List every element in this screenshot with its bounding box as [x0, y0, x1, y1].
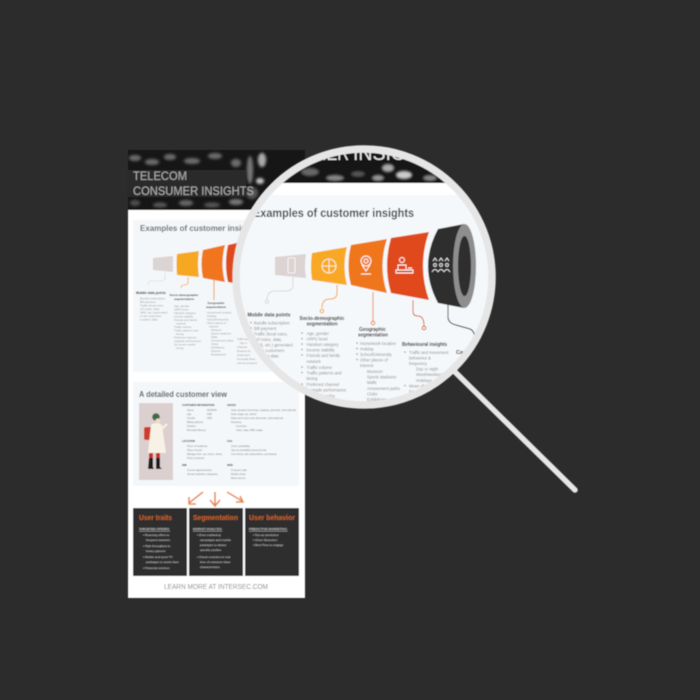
text: geographic segmentation: Geographic — [359, 327, 386, 333]
panel: segmentation — [189, 508, 243, 576]
panel: user traits: frequent travelers — [146, 538, 171, 542]
small text: mobile data points: to the customers — [140, 314, 162, 318]
small text: insights fragment: Social users — [237, 354, 251, 357]
text: socio-demographic segmentation: Income stability — [306, 348, 336, 352]
panel: segmentation: • Drive marketing — [197, 533, 221, 537]
customer attributes: Billing address — [187, 421, 204, 424]
panel: user traits: • Mobile and sport TV — [143, 555, 174, 559]
heading: A detailed customer view — [139, 389, 227, 399]
panel: user traits: User traits — [139, 515, 172, 522]
small text: geographic: Restaurants — [211, 352, 227, 356]
customer attributes: IMSI — [207, 417, 212, 420]
panel: segmentation: • Check evolution in real — [197, 555, 231, 559]
text: behavioural insights — [402, 342, 449, 394]
text: socio-demographic segmentation — [300, 316, 347, 398]
magnified header title left: MER — [313, 143, 349, 165]
small text: geographic: Geographic — [207, 301, 225, 305]
text: geographic segmentation: Exhibitions — [367, 397, 387, 402]
funnel — [275, 224, 476, 308]
small text: socio-demographic: Traffic volume — [174, 325, 192, 329]
text: socio-demographic segmentation: Handset category — [306, 342, 340, 347]
icon: demographics — [322, 259, 336, 273]
customer attributes: Current apps/sessions — [187, 469, 213, 472]
text: geographic segmentation: segmentation — [358, 332, 388, 338]
customer attributes: CHA — [227, 440, 233, 443]
small text: geographic: Malls — [211, 335, 218, 339]
panel: user behavior — [245, 508, 299, 576]
panel: segmentation: campaigns and mobile — [200, 538, 231, 542]
text: mobile data points: to the customers — [254, 348, 284, 353]
customer attributes: USAGE — [227, 404, 236, 407]
customer attributes: Voice, data, SMS usage — [236, 429, 263, 432]
icon: person at desk — [396, 258, 413, 273]
customer attributes: Roaming — [231, 421, 242, 424]
small text: socio-demographic: On-screen and/or — [174, 342, 196, 346]
text: socio-demographic segmentation: Friends and family — [306, 353, 341, 358]
customer attributes: IMEI — [207, 413, 212, 416]
small text: mobile data points: Bill payment — [140, 300, 156, 304]
panel: segmentation: time of customer base — [200, 560, 231, 564]
small text: geographic: Sports stadiums — [211, 332, 232, 336]
panel: user traits: packages to sports fans — [146, 560, 179, 564]
customer attributes: Data and voice and domestic, international — [231, 417, 283, 420]
small text: mobile data points: Traffic (local voice, — [140, 304, 164, 308]
text: socio-demographic segmentation: network — [306, 359, 322, 364]
segment: socio-demographic — [311, 247, 347, 285]
icon: phone — [288, 258, 295, 273]
panel: segmentation: MARKET ANALYSIS: — [193, 527, 222, 531]
small text: insights fragment: Day or — [240, 342, 247, 345]
icon: location pin — [361, 256, 371, 274]
magnifier lens — [228, 140, 503, 415]
panel: user traits: • High throughput to — [143, 544, 171, 548]
segment: geographic — [348, 239, 387, 293]
lens ring — [236, 149, 492, 405]
panel: user behavior: User behavior — [249, 515, 295, 522]
customer attributes: Churn probability — [231, 445, 251, 448]
panel: segmentation: characteristics — [200, 565, 220, 569]
customer attributes: Recorded Bonus — [187, 429, 206, 432]
segment: dark cylinder — [428, 224, 464, 308]
customer attributes: Mileage from, car, metro, others — [187, 453, 223, 456]
panel: a detailed customer view — [133, 382, 299, 486]
panel: user behavior: • Top-up prediction — [253, 533, 279, 537]
customer attributes: WEB — [227, 464, 233, 467]
text: geographic segmentation: Malls — [367, 380, 377, 385]
text: behavioural insights: Mean of transport — [409, 384, 442, 388]
text: geographic segmentation: Clubs — [367, 392, 377, 396]
small text: socio-demographic: Traffic patterns and — [174, 328, 198, 332]
small text: insights fragment: Personality filters — [237, 358, 256, 361]
header title line 1: TELECOM — [133, 169, 187, 183]
text: geographic segmentation: Amusement parks — [367, 386, 400, 391]
small text: socio-demographic: network — [176, 322, 186, 326]
customer attributes: Gender — [187, 417, 196, 420]
panel: user behavior: • Best Time to engage — [253, 543, 284, 547]
panel: user traits: TARGETED OFFERS: — [139, 527, 170, 531]
small text: insights fragment: Used for prospects — [237, 362, 258, 365]
panel: user behavior: • Churn Detection — [253, 538, 278, 542]
small text: socio-demographic — [170, 293, 202, 350]
panel: user traits: • Financial services — [143, 566, 170, 570]
header title line 2: CONSUMER INSIGHTS — [133, 184, 254, 198]
customer attributes: Countries — [236, 425, 247, 428]
text: mobile data points — [248, 312, 293, 358]
panel: user behavior: PREDICTIVE MARKETING: — [249, 527, 288, 531]
text: socio-demographic segmentation: Socio-demographic — [300, 316, 345, 322]
magnified header — [282, 152, 446, 184]
text: behavioural insights: Week/weekend — [416, 372, 445, 377]
small text: mobile data points: int'l voice, data, — [140, 307, 160, 311]
text: socio-demographic segmentation: Traffic volume — [306, 365, 333, 370]
text: mobile data points: int'l voice, data, — [254, 337, 282, 342]
arrows — [189, 492, 243, 506]
text: geographic segmentation: Sports stadiums — [367, 374, 396, 380]
customer attributes: MSISDN — [207, 409, 217, 412]
small text: geographic: Exhibitions — [211, 346, 225, 350]
customer attributes: Top-up probability (amount) rate — [231, 449, 267, 452]
small text: geographic: Museum — [211, 328, 222, 332]
panel: segmentation: Segmentation — [193, 515, 238, 522]
customer attributes: Place of residence — [187, 445, 208, 448]
customer attributes: Bank owners — [231, 477, 246, 480]
footer call to action: LEARN MORE AT INTERSEC.COM — [164, 582, 268, 591]
text: geographic segmentation: interest — [360, 363, 374, 368]
panel: segmentation: packages to attract — [200, 543, 226, 547]
small text: socio-demographic: Friends and family — [174, 318, 197, 322]
customer attributes: Conversion rate (subscribers, purchases) — [231, 453, 277, 456]
small text: socio-demographic: timing — [176, 332, 184, 336]
customer attributes: CUSTOMER INFORMATION — [182, 404, 215, 407]
small heading: Examples of customer insights — [140, 224, 259, 233]
small text: socio-demographic: segmentation — [174, 297, 194, 301]
text: socio-demographic segmentation: timing — [306, 376, 318, 381]
small text: socio-demographic: ARPU level — [174, 308, 189, 312]
customer attributes: SIM — [182, 464, 186, 467]
text: socio-demographic segmentation: segmentation — [306, 322, 338, 328]
text: behavioural insights: frequency — [409, 361, 428, 366]
text: behavioural insights: Behavioural insights — [402, 342, 447, 348]
small text: mobile data points: Location data — [140, 318, 158, 322]
text: care heading fragment: Care — [456, 350, 468, 356]
customer attributes: Age — [187, 413, 192, 416]
small text: insights fragment: Browsers etc. — [237, 350, 252, 353]
small text: geographic: Other places of — [207, 321, 226, 325]
text: geographic segmentation: Museum — [367, 369, 383, 374]
small text: geographic: Home/work location — [207, 310, 232, 314]
text: mobile data points: SMS, etc.) generated — [254, 342, 293, 348]
small funnel — [148, 241, 245, 300]
magnifier handle — [452, 369, 575, 490]
connectors — [265, 277, 475, 340]
text: socio-demographic segmentation: ARPU level — [306, 336, 328, 342]
text: geographic segmentation: School/University — [360, 352, 393, 357]
panel: segmentation: specific profiles — [200, 548, 222, 552]
small text: geographic: Holiday — [207, 314, 217, 318]
customer attributes — [182, 404, 296, 480]
customer attributes: Frequent calls — [231, 469, 247, 472]
small text: mobile data points: Bundle subscription — [140, 296, 166, 300]
small text: socio-demographic: Handset category — [174, 311, 197, 315]
small text: socio-demographic: Income stability — [174, 314, 194, 318]
text: behavioural insights: Day or night — [416, 366, 439, 372]
small text: mobile data points: Mobile data points — [136, 291, 166, 295]
small text: geographic: Amusement parks — [211, 338, 234, 342]
small text: geographic: interest — [209, 324, 218, 328]
text: mobile data points: Location data — [254, 354, 279, 358]
text: mobile data points: Traffic (local voice, — [254, 332, 288, 336]
text: geographic segmentation: Holiday — [360, 346, 375, 352]
text: geographic segmentation — [356, 327, 400, 402]
illustration: woman with backpack — [139, 403, 173, 480]
text: behavioural insights: (car, bus) — [409, 389, 427, 394]
customer attributes: Viewed websites categories — [187, 473, 219, 476]
text: behavioural insights: Holidays — [416, 378, 432, 383]
small text: geographic: segmentation — [206, 305, 226, 309]
small text: socio-demographic: Preferred channel — [174, 336, 197, 340]
customer attributes: Name — [187, 409, 194, 412]
text: behavioural insights: Traffic and movement — [409, 350, 449, 355]
panel: user traits: heavy gamers — [146, 549, 166, 553]
text: mobile data points: Bill payment — [254, 326, 277, 331]
small text: socio-demographic: Upgrade performance — [174, 339, 202, 343]
small text: mobile data points: SMS, etc.) generated — [140, 310, 168, 314]
small text: socio-demographic: timing — [176, 346, 184, 350]
magnified heading: Examples of customer insights — [253, 206, 414, 220]
text: mobile data points: Bundle subscription — [254, 320, 290, 326]
text: geographic segmentation: Home/work location — [360, 341, 397, 346]
customer attributes: Voice duration (incoming, outgoing, domestic, international) — [231, 409, 296, 412]
customer attributes: LOCATION — [182, 440, 195, 443]
text: socio-demographic segmentation: Upgrade performance — [306, 388, 347, 392]
customer attributes: Point of interest — [187, 457, 205, 460]
segment: behavioural — [387, 232, 429, 300]
small text: geographic: School/University — [207, 318, 229, 322]
panel: user traits — [133, 508, 187, 576]
text: socio-demographic segmentation: Age, gender — [306, 331, 329, 336]
magnified header title right: INSIGHTS — [353, 143, 445, 165]
infographic page — [128, 150, 305, 598]
small text: geographic — [206, 301, 234, 356]
text: socio-demographic segmentation: Preferred channel — [306, 382, 339, 387]
panel: examples of customer insights (small) — [133, 220, 300, 372]
segment: mobile data — [275, 254, 306, 278]
text: geographic segmentation: Other places of — [360, 358, 389, 362]
small text: geographic: Clubs — [211, 342, 219, 346]
text: mobile data points: Mobile data points — [248, 312, 290, 318]
customer attributes: Position — [187, 425, 197, 428]
icon: people with stars — [432, 258, 450, 272]
text: behavioural insights: behaviour & — [409, 356, 431, 360]
panel: user traits: • Roaming offers to — [143, 533, 170, 537]
small text: insights fragment: Channels — [237, 346, 248, 349]
small text: mobile data points — [136, 291, 168, 322]
small text: geographic: Airports — [211, 349, 221, 353]
customer attributes: Place of work — [187, 449, 203, 452]
customer attributes: Mobile shops — [231, 473, 246, 476]
text: socio-demographic segmentation: common and/or — [306, 394, 336, 398]
text: socio-demographic segmentation: Traffic patterns and — [306, 370, 342, 376]
header banner — [128, 150, 305, 210]
small text: socio-demographic: Age, gender — [174, 304, 189, 308]
small text: insights fragment: Traffic and — [237, 338, 249, 341]
customer attributes: Data usage (up, down) — [231, 413, 256, 416]
small text: socio-demographic: Socio-demographic — [170, 293, 199, 297]
